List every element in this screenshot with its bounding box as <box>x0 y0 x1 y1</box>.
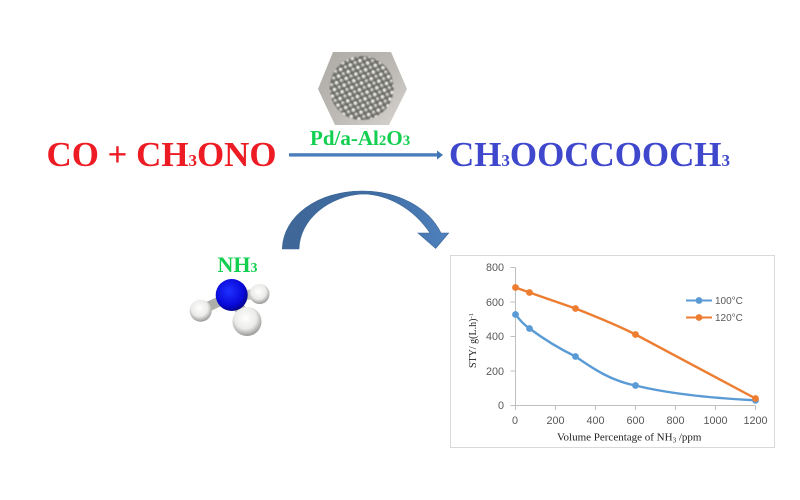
y axis tick labels: 400 <box>486 331 504 343</box>
x axis tick labels <box>512 415 768 427</box>
series: 120°C <box>512 284 759 402</box>
line chart panel <box>450 256 774 448</box>
y axis tick labels: 600 <box>486 297 504 309</box>
y axis tick labels: 0 <box>498 400 504 412</box>
y axis with ticks <box>510 268 756 410</box>
x axis tick labels: 1200 <box>743 415 768 427</box>
reactants formula: CO + CH3ONO <box>46 135 276 174</box>
x axis tick labels: 0 <box>512 415 518 427</box>
reaction arrow <box>289 150 443 160</box>
curved arrow <box>282 191 449 249</box>
NH3 label: NH3 <box>218 252 258 277</box>
x axis title: /ppm <box>676 432 702 444</box>
y axis tick labels <box>486 262 504 412</box>
x axis tick labels: 600 <box>626 415 645 427</box>
catalyst photo: hexagon of beads <box>318 52 407 125</box>
x axis title: 3 <box>673 436 677 444</box>
product formula: CH3OOCCOOCH3 <box>449 135 730 174</box>
x axis tick labels: 400 <box>586 415 605 427</box>
y axis tick labels: 200 <box>486 366 504 378</box>
ammonia molecule <box>190 279 270 336</box>
y axis title: -1 <box>468 313 475 319</box>
legend: 100°C <box>715 296 743 307</box>
x axis tick labels: 200 <box>546 415 565 427</box>
catalyst label: Pd/a-Al2O3 <box>310 126 410 150</box>
x axis title: Volume Percentage of NH <box>557 432 673 444</box>
series: 100°C <box>512 311 759 404</box>
x axis tick labels: 800 <box>666 415 685 427</box>
legend <box>686 296 743 324</box>
legend: 120°C <box>715 313 743 324</box>
y axis title: STY/ g(L.h) <box>468 319 479 368</box>
y axis tick labels: 800 <box>486 262 504 274</box>
x axis tick labels: 1000 <box>703 415 728 427</box>
